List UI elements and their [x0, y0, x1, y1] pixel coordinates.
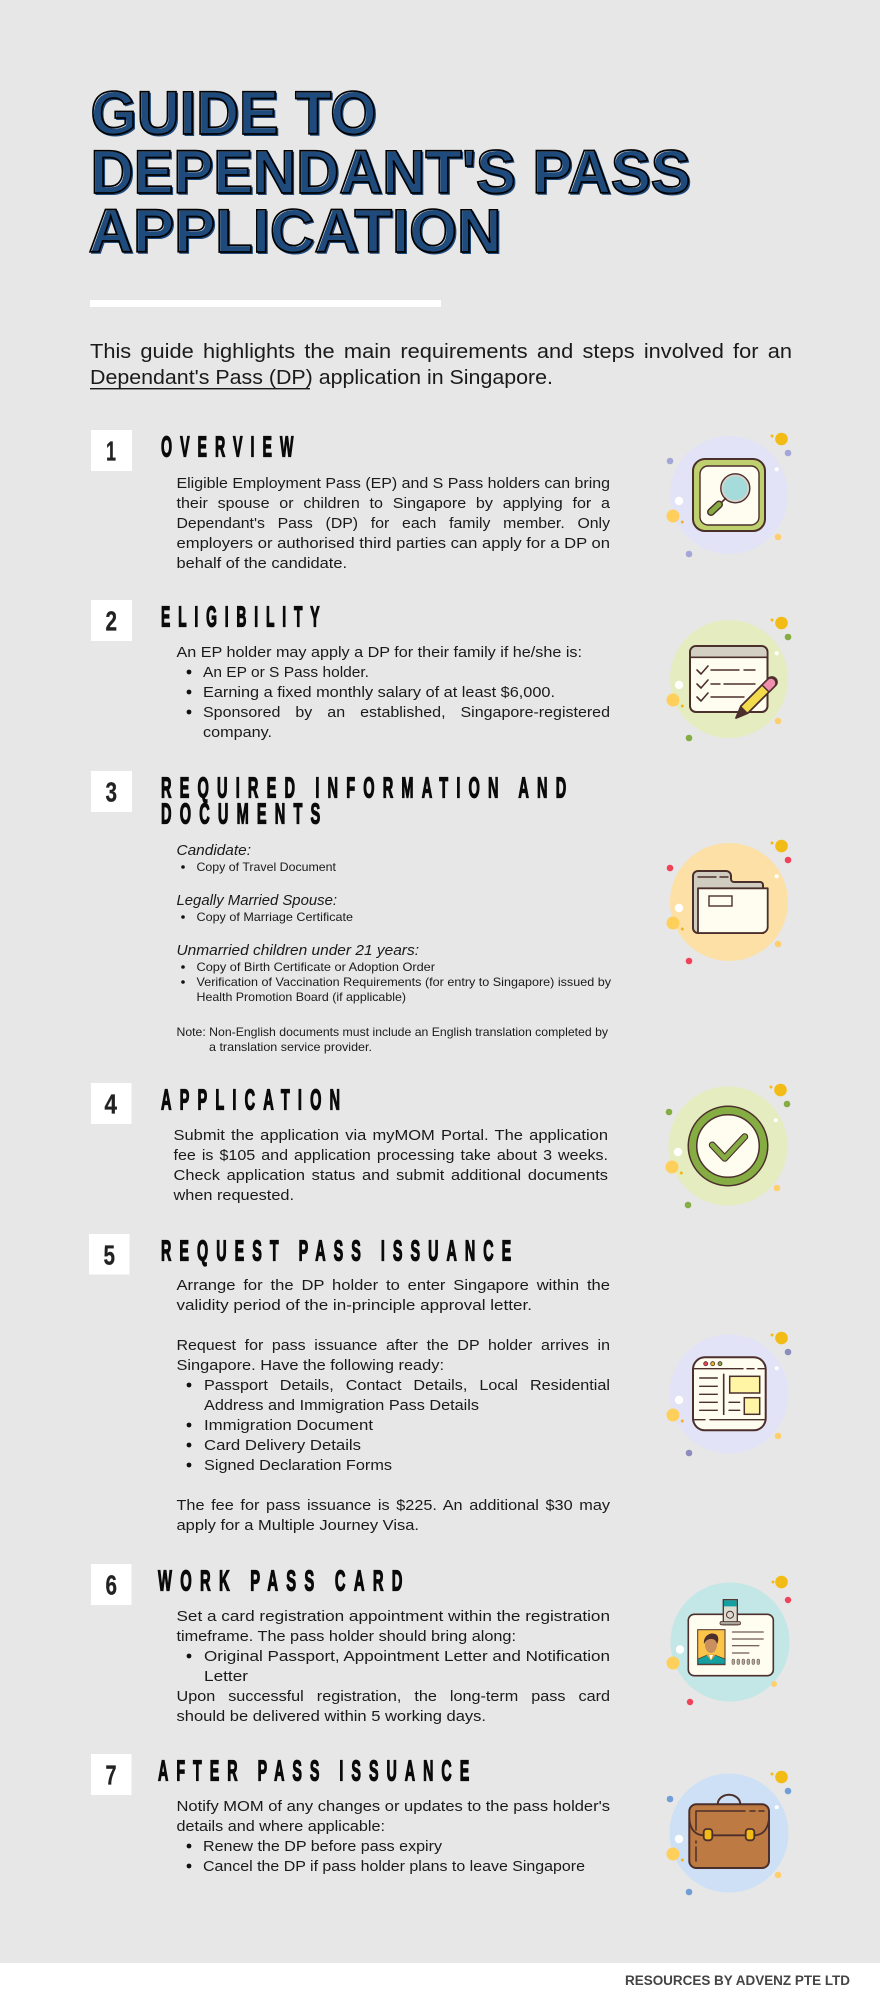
- body text: after pass issuance: Notify MOM of any changes or updates to the pass holder's: [176, 1798, 610, 1815]
- panel: 4 application: [91, 1083, 790, 1208]
- title: DEPENDANT'S PASS: [90, 138, 690, 206]
- body text: eligibility: Earning a fixed monthly salary of at least $6,000.: [203, 684, 555, 701]
- document lists: Copy of Travel Document: [196, 861, 337, 874]
- body text: application: fee is $105 and application processing take about 3 weeks.: [174, 1147, 608, 1164]
- body text: work pass card: [176, 1608, 610, 1725]
- number badge 5: [89, 1234, 130, 1274]
- body text: request pass issuance: Signed Declaration Forms: [204, 1457, 392, 1474]
- body text: eligibility: An EP or S Pass holder.: [203, 664, 369, 681]
- intro text: [90, 340, 792, 389]
- body text: work pass card: should be delivered within 5 working days.: [176, 1708, 486, 1725]
- body text: request pass issuance: Card Delivery Details: [204, 1437, 361, 1454]
- icon: briefcase: [666, 1771, 791, 1895]
- body text: work pass card: Upon successful registration, the long-term pass card: [176, 1688, 610, 1705]
- body text: work pass card: Letter: [204, 1668, 248, 1685]
- number badge 2: 2: [106, 606, 117, 636]
- number badge 6: 6: [106, 1570, 117, 1600]
- body text: overview: Eligible Employment Pass (EP) and S Pass holders can bring: [176, 475, 610, 492]
- document lists: Candidate:: [176, 842, 251, 859]
- heading: required information and documents: REQUIRED INFORMATION AND: [161, 771, 574, 804]
- body text: eligibility: Sponsored by an established, Singapore-registered: [203, 704, 610, 721]
- number badge 7: [91, 1754, 132, 1795]
- number badge 7: 7: [106, 1760, 116, 1790]
- document lists: Copy of Marriage Certificate: [196, 911, 353, 924]
- number badge 4: [91, 1083, 132, 1124]
- heading: request pass issuance: REQUEST PASS ISSUANCE: [161, 1234, 519, 1267]
- body text: overview: employers or authorised third parties can apply for a DP on: [176, 535, 610, 552]
- document lists: Verification of Vaccination Requirements (for entry to Singapore) issued by: [196, 976, 611, 989]
- number badge 5: 5: [104, 1240, 115, 1270]
- document lists: Health Promotion Board (if applicable): [196, 991, 406, 1004]
- panel: 5 request pass issuance: [89, 1234, 791, 1534]
- heading: eligibility: ELIGIBILITY: [161, 600, 327, 633]
- title: APPLICATION: [88, 197, 502, 265]
- body text: eligibility: An EP holder may apply a DP for their family if he/she is:: [176, 644, 582, 661]
- body text: eligibility: company.: [203, 724, 272, 741]
- body text: work pass card: Set a card registration appointment within the registration: [176, 1608, 610, 1625]
- body text: application: when requested.: [172, 1187, 294, 1204]
- body text: after pass issuance: [176, 1798, 610, 1875]
- title: DEPENDANT'S PASS: [92, 140, 692, 208]
- body text: request pass issuance: [176, 1277, 610, 1534]
- icon: browser window: [666, 1332, 791, 1456]
- panel: 3 required information and documents: [91, 771, 791, 1054]
- panel: 7 after pass issuance: [91, 1754, 791, 1895]
- body text: after pass issuance: Renew the DP before pass expiry: [203, 1838, 442, 1855]
- body text: request pass issuance: Request for pass issuance after the DP holder arrives in: [176, 1337, 610, 1354]
- body text: request pass issuance: Singapore. Have the following ready:: [176, 1357, 444, 1374]
- body text: after pass issuance: details and where applicable:: [176, 1818, 385, 1835]
- heading: after pass issuance: AFTER PASS ISSUANCE: [158, 1754, 477, 1787]
- body text: request pass issuance: validity period of the in-principle approval letter.: [176, 1297, 532, 1314]
- number badge 4: 4: [104, 1088, 117, 1120]
- icon: check mark badge: [666, 1084, 790, 1208]
- body text: after pass issuance: Cancel the DP if pass holder plans to leave Singapore: [203, 1858, 585, 1875]
- title divider bar: [90, 300, 441, 307]
- body text: work pass card: timeframe. The pass holder should bring along:: [176, 1628, 516, 1645]
- panel: 2 eligibility: [91, 600, 791, 741]
- number badge 6: [91, 1564, 132, 1605]
- body text: overview: behalf of the candidate.: [176, 555, 347, 572]
- body text: request pass issuance: Arrange for the DP holder to enter Singapore within the: [176, 1277, 610, 1294]
- heading: required information and documents: DOCUMENTS: [161, 797, 328, 830]
- intro text: This guide highlights the main requirements and steps involved for an: [90, 340, 792, 363]
- body text: request pass issuance: Immigration Document: [204, 1417, 374, 1434]
- document lists: Unmarried children under 21 years:: [176, 942, 419, 959]
- body text: overview: Dependant's Pass (DP) for each family member. Only: [176, 515, 610, 532]
- panel: 6 work pass card: [91, 1564, 791, 1725]
- body text: application: [172, 1127, 608, 1204]
- body text: request pass issuance: apply for a Multiple Journey Visa.: [176, 1517, 419, 1534]
- panel: 1 overview: [91, 430, 791, 572]
- body text: overview: their spouse or children to Singapore by applying for a: [176, 495, 611, 512]
- number badge 1: 1: [106, 436, 116, 466]
- document lists: Legally Married Spouse:: [176, 892, 337, 909]
- body text: request pass issuance: Passport Details, Contact Details, Local Residential: [204, 1377, 610, 1394]
- body text: request pass issuance: The fee for pass issuance is $225. An additional $30 may: [176, 1497, 610, 1514]
- intro text: Dependant's Pass (DP) application in Singapore.: [90, 366, 553, 389]
- footer band: [0, 1963, 880, 2000]
- body text: eligibility: [176, 644, 610, 741]
- icon: id card: [666, 1576, 791, 1705]
- title: APPLICATION: [90, 198, 503, 266]
- body text: request pass issuance: Address and Immigration Pass Details: [204, 1397, 479, 1414]
- icon: checklist and pencil: [666, 617, 791, 741]
- number badge 2: [91, 600, 132, 641]
- body text: overview: [176, 475, 611, 572]
- icon: folder: [666, 840, 791, 964]
- heading: application: APPLICATION: [161, 1083, 348, 1116]
- body text: application: Check application status and submit additional documents: [174, 1167, 608, 1184]
- document lists: a translation service provider.: [209, 1041, 372, 1054]
- document lists: Copy of Birth Certificate or Adoption Order: [196, 961, 435, 974]
- title: GUIDE TO: [92, 80, 378, 148]
- title: GUIDE TO: [90, 79, 376, 147]
- title: [88, 79, 692, 266]
- number badge 3: [91, 771, 132, 812]
- heading: work pass card: WORK PASS CARD: [158, 1564, 411, 1597]
- document lists: Note: Non-English documents must include an English translation completed by: [176, 1026, 608, 1039]
- number badge 1: [91, 430, 132, 471]
- document lists: [176, 842, 611, 1054]
- icon: magnifier on document: [666, 433, 791, 557]
- body text: work pass card: Original Passport, Appointment Letter and Notification: [204, 1648, 610, 1665]
- number badge 3: 3: [106, 776, 117, 808]
- heading: overview: OVERVIEW: [161, 430, 301, 463]
- heading: required information and documents: [161, 771, 574, 830]
- footer band: RESOURCES BY ADVENZ PTE LTD: [625, 1973, 850, 1988]
- body text: application: Submit the application via myMOM Portal. The application: [174, 1127, 608, 1144]
